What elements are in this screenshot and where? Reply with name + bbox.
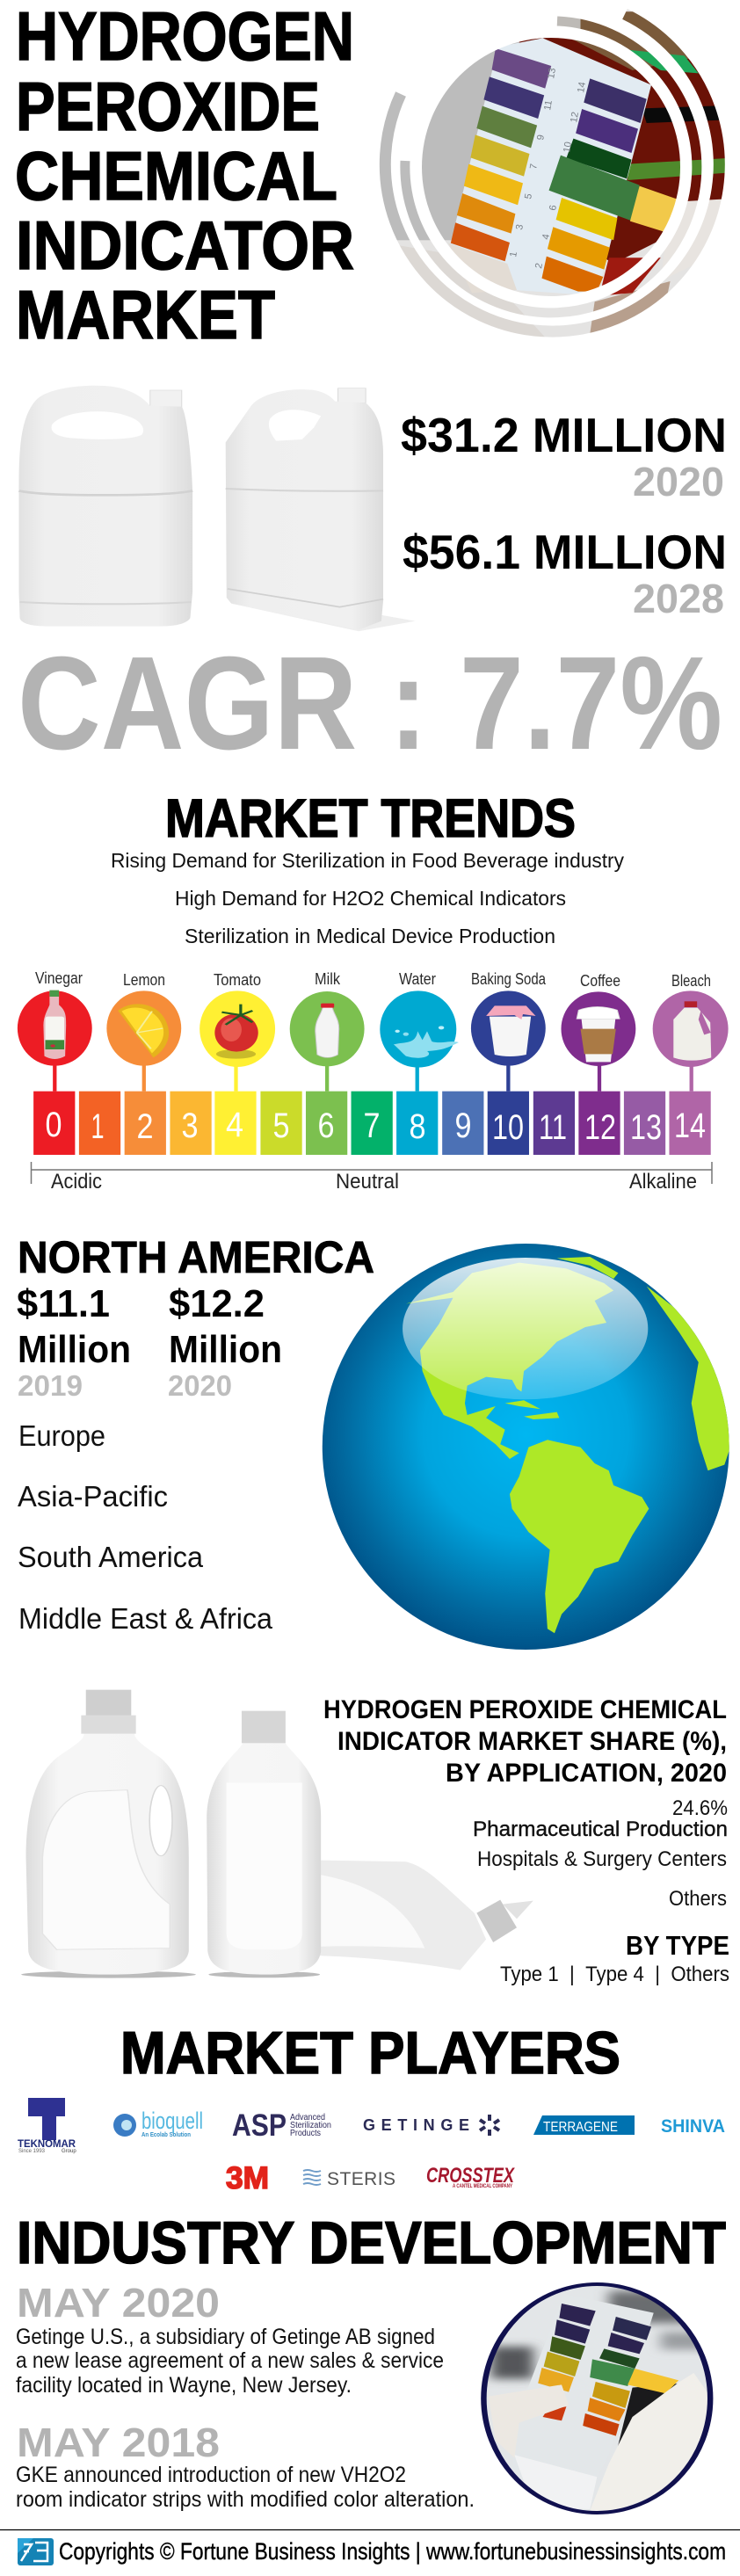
stat: north america 2020: [168, 1282, 282, 1402]
pH digits: 2: [137, 1107, 153, 1146]
icon: water: [380, 990, 459, 1068]
heading: market trends: MARKET TRENDS: [165, 788, 576, 848]
logo: crosstex: CROSSTEX: [426, 2164, 516, 2188]
icon: tomato: [200, 990, 275, 1067]
photo: indicator strip in concentric rings: 11: [542, 99, 555, 112]
pH item labels: Milk: [315, 970, 341, 988]
photo: gloved hand with indicator strip: [481, 2282, 714, 2514]
text block: May 2020: a new lease agreement of a new sales & service: [16, 2348, 444, 2373]
text block: application shares: Others: [669, 1887, 727, 1911]
text block: other regions: Europe: [18, 1419, 105, 1452]
icon: two white jugs: [18, 386, 416, 631]
title: CHEMICAL: [15, 137, 337, 214]
photo: indicator strip in concentric rings: 10: [562, 141, 574, 154]
heading: north america: NORTH AMERICA: [18, 1232, 374, 1282]
pH digits: 13: [630, 1108, 662, 1147]
logo: terragene: TERRAGENE: [543, 2120, 618, 2135]
logo: terragene: [533, 2115, 635, 2135]
icon: slim bottle: [207, 1711, 321, 1975]
photo: indicator strip in concentric rings: 7: [528, 163, 540, 171]
stat: north america 2019: Million: [18, 1328, 131, 1371]
text block: application shares: Pharmaceutical Production: [473, 1818, 728, 1841]
text block: May 2020: facility located in Wayne, New Jersey.: [16, 2373, 352, 2398]
pH item labels: Bleach: [671, 972, 711, 990]
pH item labels: [35, 969, 711, 990]
pH item labels: Coffee: [580, 972, 620, 990]
photo: indicator strip in concentric rings: 6: [548, 204, 559, 212]
logo: ASP: Products: [290, 2129, 321, 2138]
logo: fortune business insights: [18, 2538, 54, 2565]
heading: market share by application: BY APPLICATION, 2020: [446, 1759, 727, 1788]
logo: shinva: SHINVA: [661, 2116, 725, 2137]
logo: teknomar: Group: [62, 2149, 76, 2154]
photo: indicator strip in concentric rings: 1: [508, 250, 519, 258]
photo: indicator strip in concentric rings: 14: [576, 81, 588, 94]
icon: baking soda: [471, 990, 546, 1066]
text block: trends list: Rising Demand for Sterilization in Food Beverage industry: [111, 849, 624, 872]
pH digits: 14: [674, 1107, 706, 1145]
text block: other regions: [18, 1419, 273, 1635]
pH digits: 8: [410, 1107, 425, 1146]
heading: market players: MARKET PLAYERS: [120, 2020, 620, 2086]
logo: ASP: [232, 2108, 331, 2143]
logo: bioquell: bioquell: [141, 2108, 203, 2134]
text block: application shares: Hospitals & Surgery Centers: [477, 1847, 727, 1871]
icon: right jug: [226, 388, 416, 631]
photo: indicator strip in concentric rings: 12: [569, 111, 581, 124]
logo: steris: STERIS: [327, 2169, 395, 2189]
pH colour bars: [33, 1092, 711, 1155]
text block: May 2020: MAY 2020: [17, 2280, 220, 2326]
stat: north america 2019: [17, 1282, 131, 1402]
text block: May 2020: Getinge U.S., a subsidiary of Getinge AB signed: [16, 2325, 435, 2349]
stat: north america 2020: $12.2: [169, 1282, 265, 1325]
pH digits: 5: [272, 1107, 290, 1145]
logo: ASP: Sterilization: [290, 2121, 331, 2130]
stat: 2028 market size: $56.1 MILLION: [403, 525, 727, 579]
heading: by type: BY TYPE: [626, 1930, 729, 1961]
text block: May 2018: MAY 2018: [17, 2420, 220, 2465]
icon: large bottle: [26, 1690, 189, 1975]
title: PEROXIDE: [16, 68, 320, 145]
stat: north america 2019: $11.1: [17, 1282, 110, 1325]
icon: left jug: [18, 386, 192, 627]
pH stems: [54, 1063, 692, 1092]
icon: milk: [290, 991, 365, 1066]
text block: other regions: South America: [18, 1541, 204, 1573]
text block: other regions: Middle East & Africa: [18, 1602, 273, 1635]
logo: ASP: ASP: [232, 2108, 287, 2143]
text block: application shares: 24.6%: [672, 1796, 728, 1820]
photo: indicator strip in concentric rings: 4: [540, 233, 552, 241]
title: MARKET: [16, 276, 275, 353]
logo: bioquell: An Ecolab Solution: [141, 2132, 191, 2138]
logo: teknomar: TEKNOMAR: [18, 2137, 76, 2150]
text block: application shares: [473, 1796, 728, 1911]
pH axis: [32, 1162, 712, 1184]
stat: 2020 market size: [401, 408, 727, 504]
title: INDICATOR: [16, 207, 354, 284]
photo: indicator strip in concentric rings: [380, 9, 725, 337]
logo: bioquell: [113, 2108, 203, 2138]
logo: getinge: [363, 2115, 499, 2136]
stat: north america 2019: 2019: [18, 1369, 83, 1402]
icon: bleach: [653, 990, 729, 1067]
section: bottles illustration: [21, 1690, 533, 1978]
pH item labels: Vinegar: [35, 969, 83, 987]
bottle shadows: [21, 1971, 320, 1978]
icon: lemon: [106, 990, 181, 1066]
logo: getinge: GETINGE: [363, 2116, 469, 2134]
text block: other regions: Asia-Pacific: [18, 1480, 168, 1513]
pH digits: 0: [46, 1106, 62, 1144]
pH item labels: Water: [399, 970, 436, 988]
pH digits: 1: [91, 1107, 104, 1146]
pH digits: 4: [226, 1106, 243, 1144]
footer rule: [0, 2529, 740, 2531]
stat: north america 2020: 2020: [168, 1369, 232, 1402]
logo: 3M: 3M: [226, 2161, 269, 2195]
pH digits: 11: [539, 1108, 567, 1147]
photo: indicator strip in concentric rings: 5: [523, 192, 534, 200]
text block: May 2020: [16, 2280, 444, 2398]
pH digits: 9: [455, 1107, 471, 1145]
pH digits: 3: [181, 1107, 199, 1145]
stat: 2020 market size: 2020: [633, 459, 724, 504]
photo: indicator strip in concentric rings: 2: [533, 262, 545, 270]
text block: May 2018: room indicator strips with modified color alteration.: [16, 2487, 475, 2512]
icon: globe: [323, 1244, 736, 1650]
stat: 2020 market size: $31.2 MILLION: [401, 408, 727, 462]
stat: 2028 market size: 2028: [633, 576, 724, 621]
text block: trends list: High Demand for H2O2 Chemical Indicators: [175, 887, 566, 910]
photo: indicator strip in concentric rings: 13: [546, 67, 558, 80]
logo: ASP: Advanced: [290, 2113, 325, 2122]
pH digits: 6: [318, 1107, 334, 1145]
pH axis labels: Neutral: [336, 1170, 399, 1194]
pH axis labels: Acidic: [51, 1170, 102, 1194]
text block: trends list: [111, 849, 624, 947]
pH axis labels: Alkaline: [629, 1170, 697, 1194]
text block: trends list: Sterilization in Medical Device Production: [185, 925, 555, 947]
text block: May 2018: GKE announced introduction of new VH2O2: [16, 2463, 406, 2487]
pH axis labels: [51, 1170, 697, 1194]
heading: market share by application: [323, 1695, 727, 1788]
stat: north america 2020: Million: [169, 1328, 282, 1371]
pH item labels: Lemon: [123, 971, 165, 989]
icon: coffee: [561, 991, 635, 1066]
pH item labels: Tomato: [214, 971, 261, 989]
pH digits: [46, 1106, 706, 1147]
title: [15, 0, 354, 353]
logo: teknomar: [18, 2098, 76, 2154]
photo: indicator strip in concentric rings: 3: [514, 223, 526, 231]
photo: indicator strip in concentric rings: 9: [535, 134, 547, 141]
logo: teknomar: Since 1993: [18, 2149, 46, 2154]
icon: lying bottle: [316, 1861, 533, 1970]
icon: vinegar: [18, 990, 92, 1066]
pH digits: 7: [364, 1107, 380, 1145]
pH item labels: Baking Soda: [471, 970, 547, 988]
logo: crosstex: A CANTEL MEDICAL COMPANY: [453, 2184, 512, 2189]
pH digits: 12: [584, 1108, 616, 1147]
pH digits: 10: [492, 1108, 524, 1147]
stat: 2028 market size: [403, 525, 727, 621]
text block: May 2018: [16, 2420, 475, 2512]
chart: pH scale: [18, 969, 729, 1194]
